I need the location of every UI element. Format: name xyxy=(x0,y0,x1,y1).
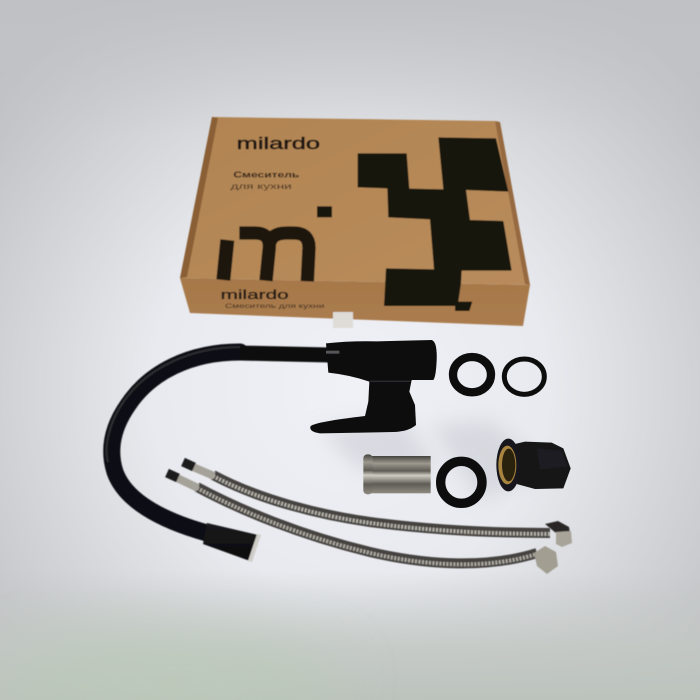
box left flap xyxy=(180,117,218,278)
soft shadows on surface xyxy=(320,415,550,500)
rubber gaskets xyxy=(441,357,544,503)
upper hose xyxy=(213,475,550,533)
upper hose ferrule xyxy=(193,467,214,476)
subheading: for kitchen: для кухни xyxy=(231,182,292,191)
box front face xyxy=(180,278,530,326)
front caption: Смеситель для кухни xyxy=(225,303,325,310)
straight tube xyxy=(240,353,330,355)
steel sleeve xyxy=(363,454,431,494)
cardboard box xyxy=(180,117,530,328)
braided supply hoses xyxy=(167,462,550,564)
lower hose xyxy=(197,487,537,563)
large m mark xyxy=(223,233,309,281)
hose nut upper xyxy=(534,521,572,574)
heading: mixer: Смеситель xyxy=(233,170,299,179)
upper hose tip xyxy=(183,462,194,467)
gasket 3 xyxy=(441,461,482,503)
faucet body xyxy=(310,340,437,433)
box top face xyxy=(180,117,530,285)
flexible spout hose xyxy=(107,347,330,533)
box pattern and lettering xyxy=(221,134,512,311)
small black square xyxy=(317,206,332,217)
box right flap xyxy=(495,121,530,285)
white sticker xyxy=(333,312,353,328)
hose nut lower xyxy=(534,546,558,574)
tinted lower-left glow on surface xyxy=(0,635,340,700)
gasket 1 xyxy=(453,357,491,392)
milardo logo front: milardo xyxy=(221,288,289,302)
milardo logo top: milardo xyxy=(237,134,320,153)
gasket 2 xyxy=(504,359,544,394)
lower hose ferrule xyxy=(177,478,198,488)
spout nozzle xyxy=(203,523,261,562)
black pixel pattern xyxy=(358,137,512,311)
black mounting nut with brass insert xyxy=(496,439,571,491)
lower hose tip xyxy=(167,473,178,478)
